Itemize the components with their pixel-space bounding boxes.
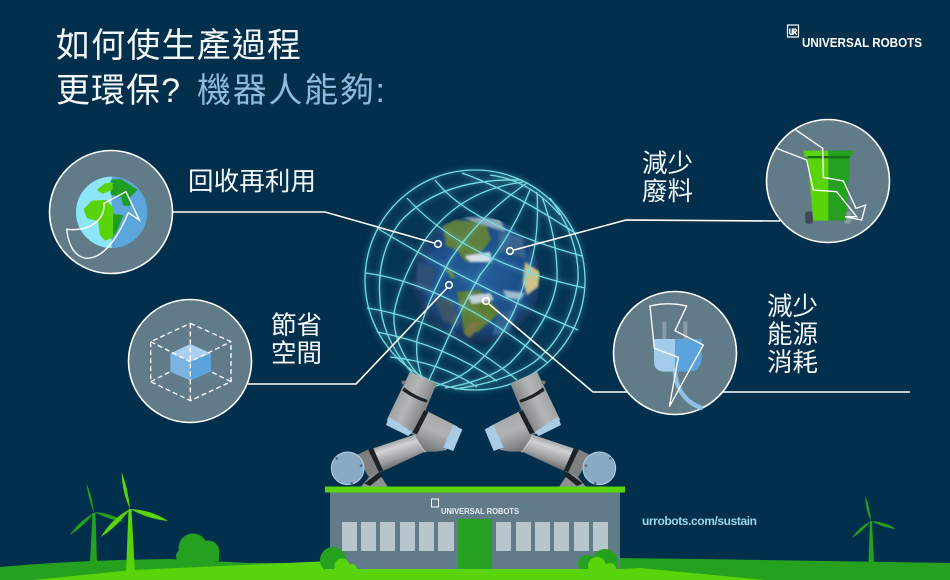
label: reduce energy: 能源: [767, 321, 818, 349]
callout line: space: [248, 282, 452, 384]
wireframe mesh: [365, 170, 585, 390]
robot arm: left: [331, 372, 462, 487]
label: reduce energy: 減少: [767, 293, 818, 321]
label: reduce waste: 減少: [642, 150, 693, 178]
ground: hills and bush: [0, 534, 950, 580]
callout line: recycling: [172, 212, 441, 247]
panel: reduce waste icon: [766, 120, 890, 242]
callout line: energy: [483, 298, 910, 392]
panel: reduce energy icon: [614, 292, 736, 414]
wind turbine: front left: [101, 472, 168, 574]
title: 更環保?: [56, 72, 180, 110]
logo: Universal Robots: [788, 25, 922, 50]
label: reduce waste: 廢料: [642, 178, 693, 206]
label: save space: 節省: [271, 312, 322, 340]
label: save space: [271, 312, 322, 368]
title: [56, 27, 385, 110]
label: recycling: 回收再利用: [188, 168, 316, 196]
earth: [412, 216, 540, 344]
wind turbine: right: [852, 496, 896, 562]
door: [458, 519, 492, 569]
panel: recycling icon: [50, 150, 172, 274]
label: reduce energy: 消耗: [767, 349, 818, 377]
label: save space: 空間: [271, 340, 322, 368]
logo on building: [432, 499, 520, 516]
windows: [342, 522, 608, 551]
globe: earth with wireframe mesh: [365, 170, 585, 390]
logo: Universal Robots: UNIVERSAL ROBOTS: [802, 35, 922, 50]
factory building: [325, 486, 625, 570]
label: reduce energy: [767, 293, 818, 377]
bushes near factory: [320, 547, 620, 580]
callout line: waste: [507, 220, 780, 254]
logo on building: UNIVERSAL ROBOTS: [441, 507, 520, 516]
label: reduce waste: [642, 150, 693, 206]
title: 機器人能夠:: [197, 72, 385, 110]
title: 如何使生產過程: [56, 27, 301, 65]
logo: Universal Robots: UR: [788, 27, 798, 37]
robot arm: right: [485, 372, 616, 487]
wind turbine: back left: [70, 483, 124, 563]
url text: urrobots.com/sustain: [642, 514, 757, 528]
panel: save space icon: [128, 300, 252, 422]
